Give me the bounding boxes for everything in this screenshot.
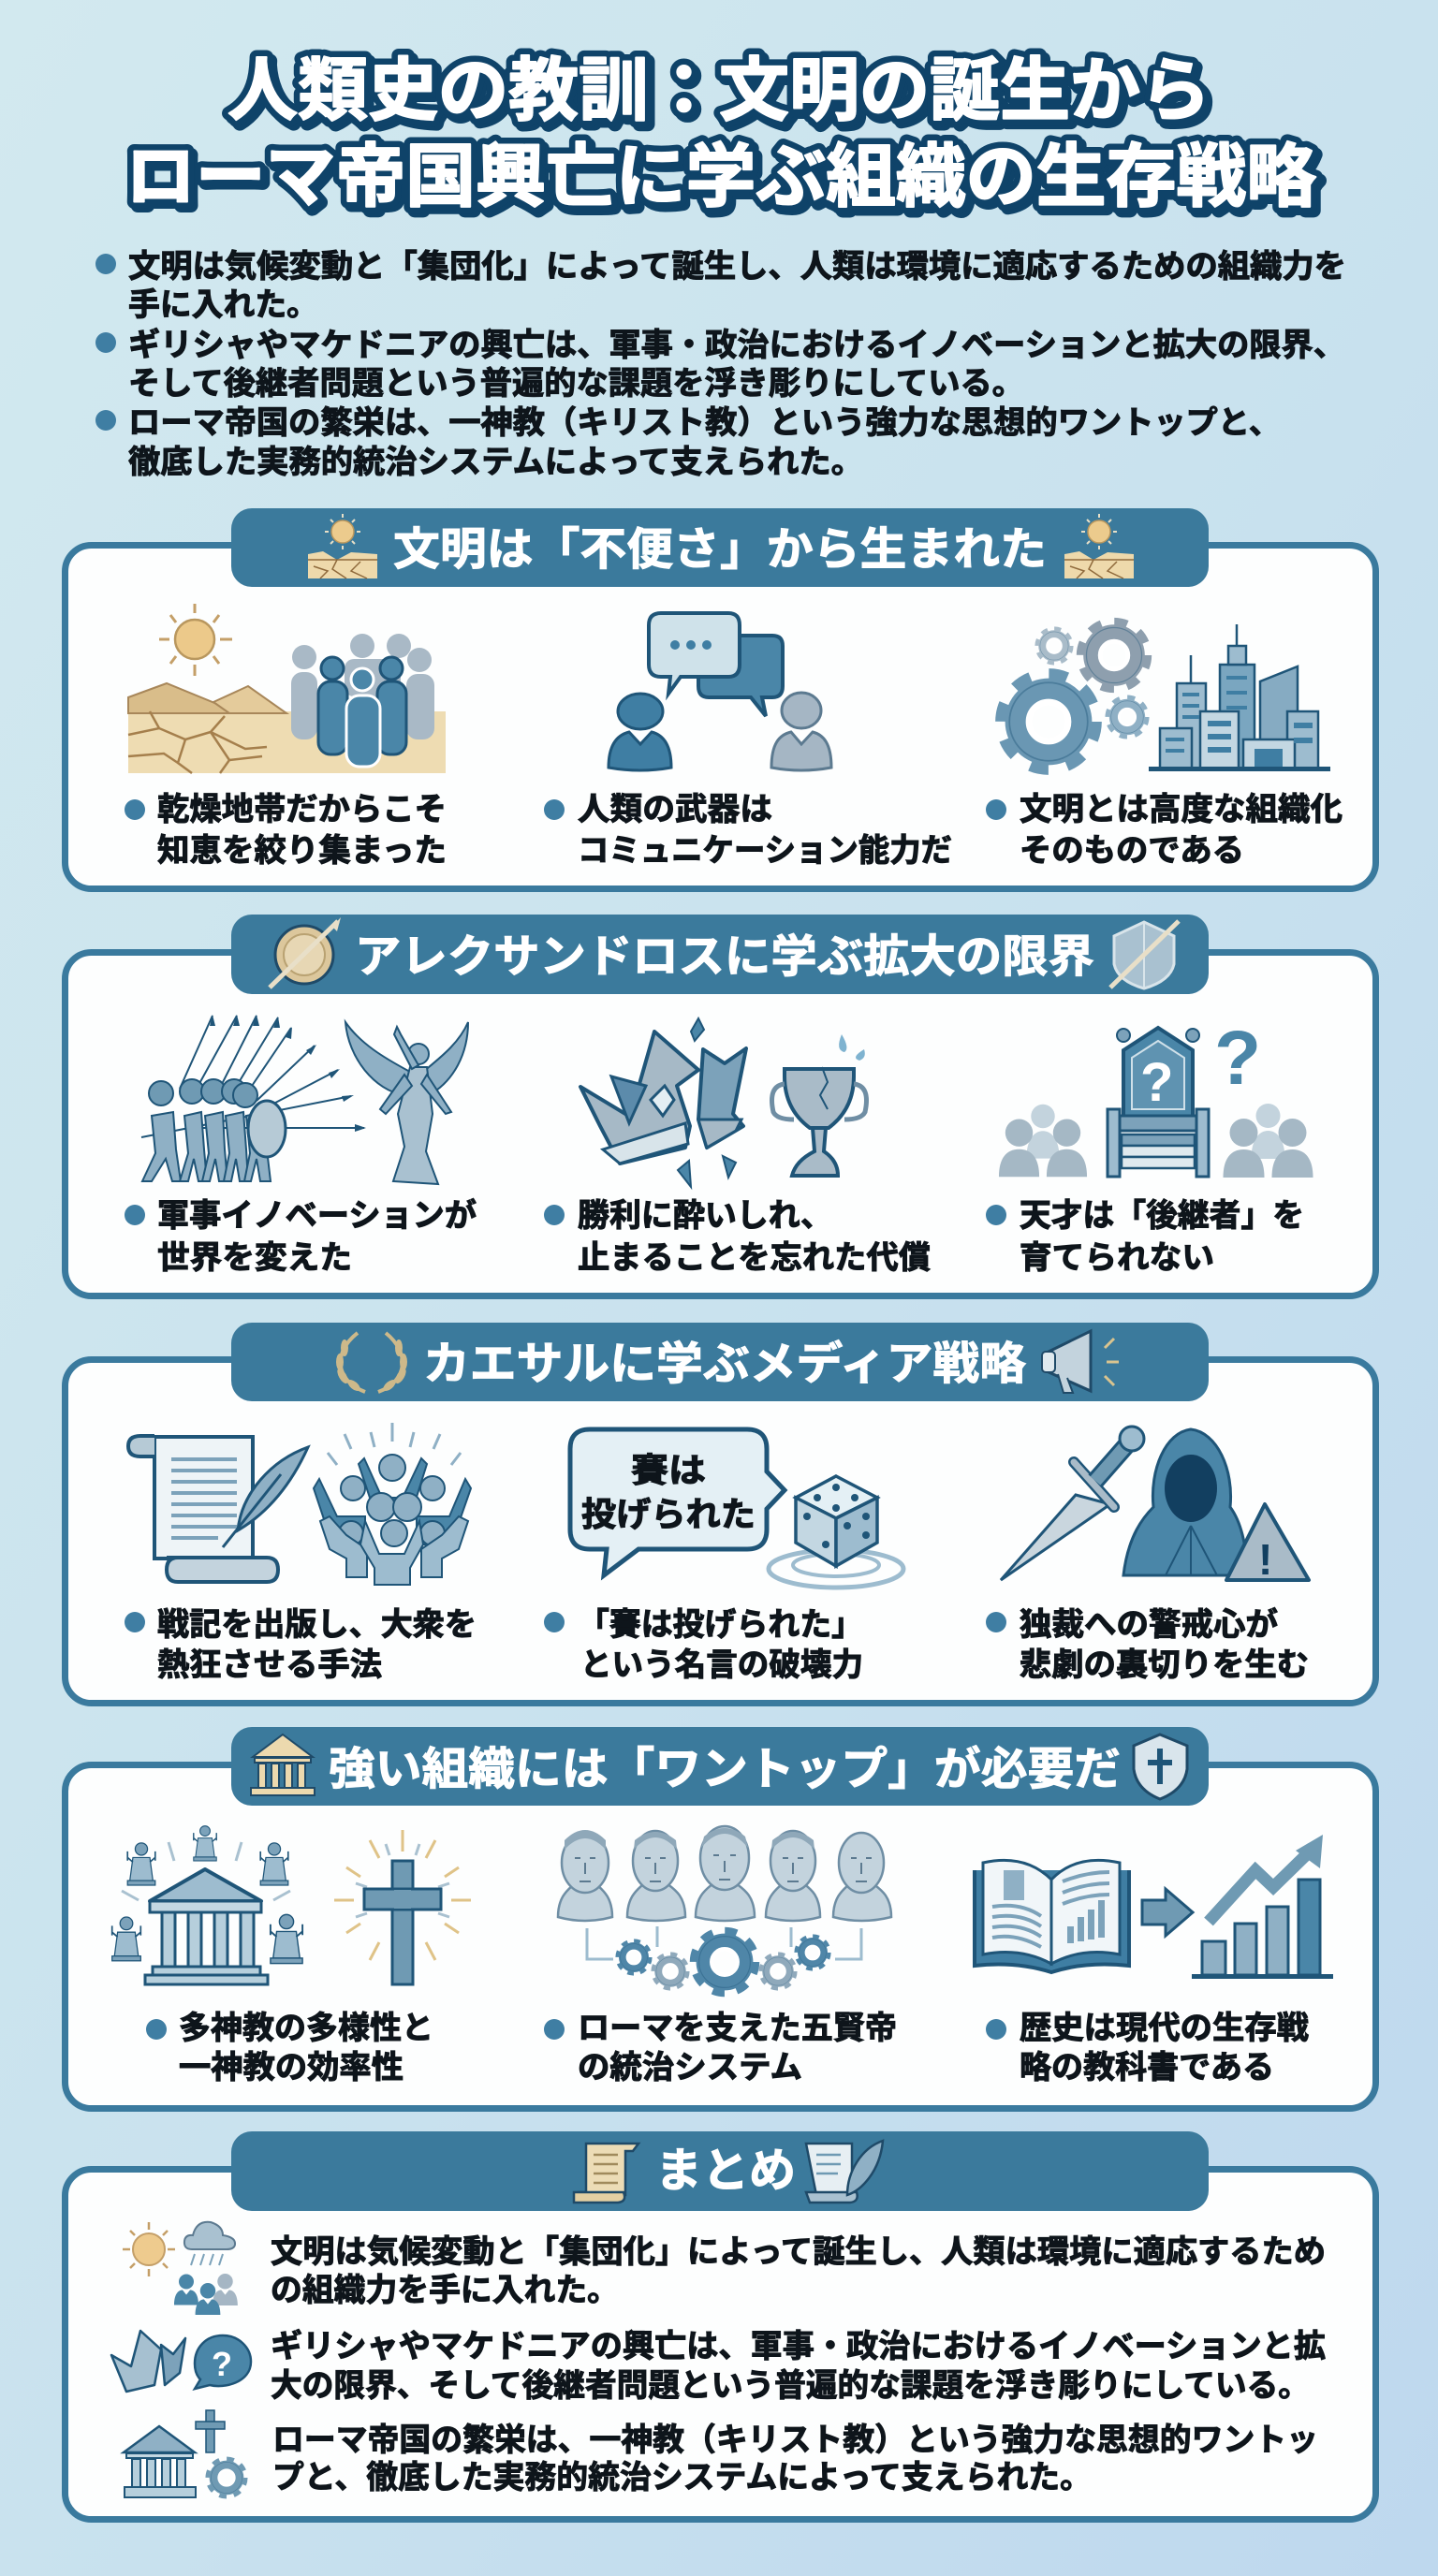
text: 乾燥地帯: 乾燥地帯だからこそ (157, 792, 447, 827)
intro bullet list: 文明は気候変動と「集団化」によって誕生し、人類は環境に適応するための組織力を (128, 249, 1346, 285)
title: ローマ帝国興亡に学ぶ組織の生存戦略 (125, 138, 1316, 215)
icon: two people talking (609, 613, 831, 770)
intro bullet list: ギリシャやマケドニアの興亡は、軍事・政治におけるイノベーションと拡大の限界、 (128, 328, 1345, 363)
text: 軍事イノベーション: 世界を変えた (157, 1240, 352, 1276)
text: 人類の武器: 人類の武器は (578, 792, 772, 827)
icon: gears and city (1004, 623, 1330, 771)
panel 5 heading (231, 2131, 1209, 2211)
text: summary 3: プと、徹底した実務的統治システムによって支えられた。 (272, 2460, 1092, 2496)
panel 1 heading: 文明は「不便さ」から生まれた (393, 525, 1047, 575)
text: 歴史は現代の生存戦略: 歴史は現代の生存戦 (1020, 2011, 1309, 2046)
intro bullet list (95, 249, 1346, 480)
panel: 強い組織にはワントップが必要だ (66, 1727, 1376, 2108)
text: 文明とは組織化: そのものである (1020, 833, 1244, 869)
text: 人類の武器 (544, 792, 952, 869)
icon: crown and question bubble: ? (212, 2345, 232, 2383)
text: 戦記を出版し: 熱狂させる手法 (157, 1647, 382, 1683)
icon: dagger, hooded figure and warning: ! (1258, 1535, 1272, 1584)
text: summary 2: ギリシャやマケドニアの興亡は、軍事・政治におけるイノベーションと拡 (271, 2329, 1326, 2364)
text: 賽は投げられた: という名言の破壊力 (580, 1647, 863, 1683)
text: summary 3 (272, 2422, 1318, 2496)
text: 戦記を出版し: 戦記を出版し、大衆を (157, 1607, 477, 1643)
icon: broken crown and cracked trophy (580, 1018, 867, 1187)
icon: polytheistic temple (112, 1826, 302, 1984)
panel: カエサルに学ぶメディア戦略 (66, 1323, 1376, 1704)
text: ローマを支えた五賢帝 (544, 2011, 897, 2086)
text: 賽は投げられた: 「賽は投げられた」 (578, 1607, 863, 1643)
icon: temple, cross and gear (124, 2410, 244, 2497)
icon: speech bubble with quote: 賽は (631, 1451, 706, 1489)
text: ローマを支えた五賢帝: の統治システム (578, 2050, 802, 2086)
text: summary 2 (271, 2329, 1326, 2404)
panel: まとめ (66, 2131, 1376, 2520)
title: ローマ帝国興亡に学ぶ組織の生存戦略 (125, 138, 1316, 215)
intro bullet list: ローマ帝国の繁栄は、一神教（キリスト教）という強力な思想的ワントップと、 (128, 405, 1281, 441)
icon: dice with ripples (769, 1476, 903, 1588)
text: 独裁への警戒心: 悲劇の裏切りを生む (1020, 1647, 1309, 1683)
icon: cheering crowd (314, 1423, 471, 1585)
panel 2 heading: アレクサンドロスに学ぶ拡大の限界 (355, 932, 1094, 982)
icon: sun, rain and people (123, 2222, 238, 2315)
text: ローマを支えた五賢帝: ローマを支えた五賢帝 (578, 2011, 897, 2046)
icon: empty throne and question mark (999, 1016, 1313, 1178)
title: 人類史の教訓：文明の誕生から (231, 55, 1214, 133)
text: 独裁への警戒心: 独裁への警戒心が (1020, 1606, 1278, 1643)
icon: scroll and quill (128, 1436, 308, 1582)
panel: 文明は不便さから生まれた (66, 508, 1376, 889)
panel 4 heading: 強い組織には「ワントップ」が必要だ (329, 1745, 1121, 1794)
title (125, 51, 1320, 219)
text: 文明とは組織化: 文明とは高度な組織化 (1020, 792, 1343, 827)
icon: book to rising chart (975, 1835, 1333, 1979)
text: summary 1: の組織力を手に入れた。 (271, 2273, 619, 2308)
text: 天才は後継者を: 育てられない (1020, 1240, 1214, 1276)
panel 3 heading: カエサルに学ぶメディア戦略 (423, 1339, 1026, 1389)
text: 軍事イノベーション: 軍事イノベーションが (157, 1197, 477, 1234)
text: 独裁への警戒心 (986, 1606, 1309, 1683)
title: 人類史の教訓：文明の誕生から (227, 51, 1211, 129)
icon: dry land and crowd (128, 604, 446, 773)
text: 勝利に酔いしれ (544, 1198, 931, 1276)
text: summary 3: ローマ帝国の繁栄は、一神教（キリスト教）という強力な思想的ワントッ (272, 2422, 1318, 2458)
icon: speech bubble with quote (570, 1429, 785, 1575)
text: 乾燥地帯: 知恵を絞り集まった (157, 833, 447, 869)
panel 1 heading (231, 508, 1209, 587)
intro bullet list: 徹底した実務的統治システムによって支えられた。 (128, 445, 863, 480)
icon: phalanx and winged victory (141, 1015, 468, 1184)
text: 多神教の多様性: 多神教の多様性と (179, 2011, 433, 2046)
text: 天才は後継者を (986, 1198, 1304, 1276)
icon: crown and question bubble (111, 2331, 251, 2392)
text: 天才は後継者を: 天才は「後継者」を (1020, 1198, 1304, 1234)
text: 文明とは組織化 (986, 792, 1343, 869)
icon: glowing cross (334, 1830, 471, 1984)
text: summary 1 (271, 2234, 1326, 2308)
icon: five good emperors (558, 1826, 891, 1991)
icon: speech bubble with quote: 投げられた (581, 1495, 756, 1533)
icon: empty throne and question mark: ? (1214, 1016, 1261, 1101)
intro bullet list: そして後継者問題という普遍的な課題を浮き彫りにしている。 (128, 366, 1024, 402)
text: 人類の武器: コミュニケーション能力だ (578, 833, 952, 869)
panel 3 heading (231, 1323, 1209, 1401)
text: 多神教の多様性: 一神教の効率性 (179, 2050, 404, 2086)
panel: アレクサンドロスに学ぶ拡大の限界 (66, 915, 1376, 1295)
panel 2 heading (231, 915, 1209, 994)
panel 5 heading: まとめ (655, 2144, 796, 2197)
panel 4 heading (231, 1727, 1209, 1806)
text: 勝利に酔いしれ: 止まることを忘れた代償 (578, 1240, 931, 1276)
text: 乾燥地帯 (125, 792, 447, 869)
text: summary 2: 大の限界、そして後継者問題という普遍的な課題を浮き彫りにしている。 (271, 2368, 1310, 2404)
text: 軍事イノベーション (125, 1197, 477, 1276)
title: ローマ帝国興亡に学ぶ組織の生存戦略 (129, 141, 1320, 219)
text: 勝利に酔いしれ: 勝利に酔いしれ、 (578, 1198, 832, 1234)
title: 人類史の教訓：文明の誕生から (227, 51, 1211, 129)
text: 歴史は現代の生存戦略: 略の教科書である (1020, 2050, 1274, 2086)
icon: empty throne and question mark: ? (1140, 1052, 1173, 1113)
text: 多神教の多様性 (146, 2011, 433, 2086)
text: summary 1: 文明は気候変動と「集団化」によって誕生し、人類は環境に適応するため (271, 2234, 1326, 2270)
intro bullet list: 手に入れた。 (128, 287, 318, 323)
text: 戦記を出版し (125, 1607, 477, 1683)
text: 歴史は現代の生存戦略 (986, 2011, 1309, 2086)
icon: dagger, hooded figure and warning (1001, 1427, 1309, 1584)
text: 賽は投げられた (544, 1607, 863, 1683)
